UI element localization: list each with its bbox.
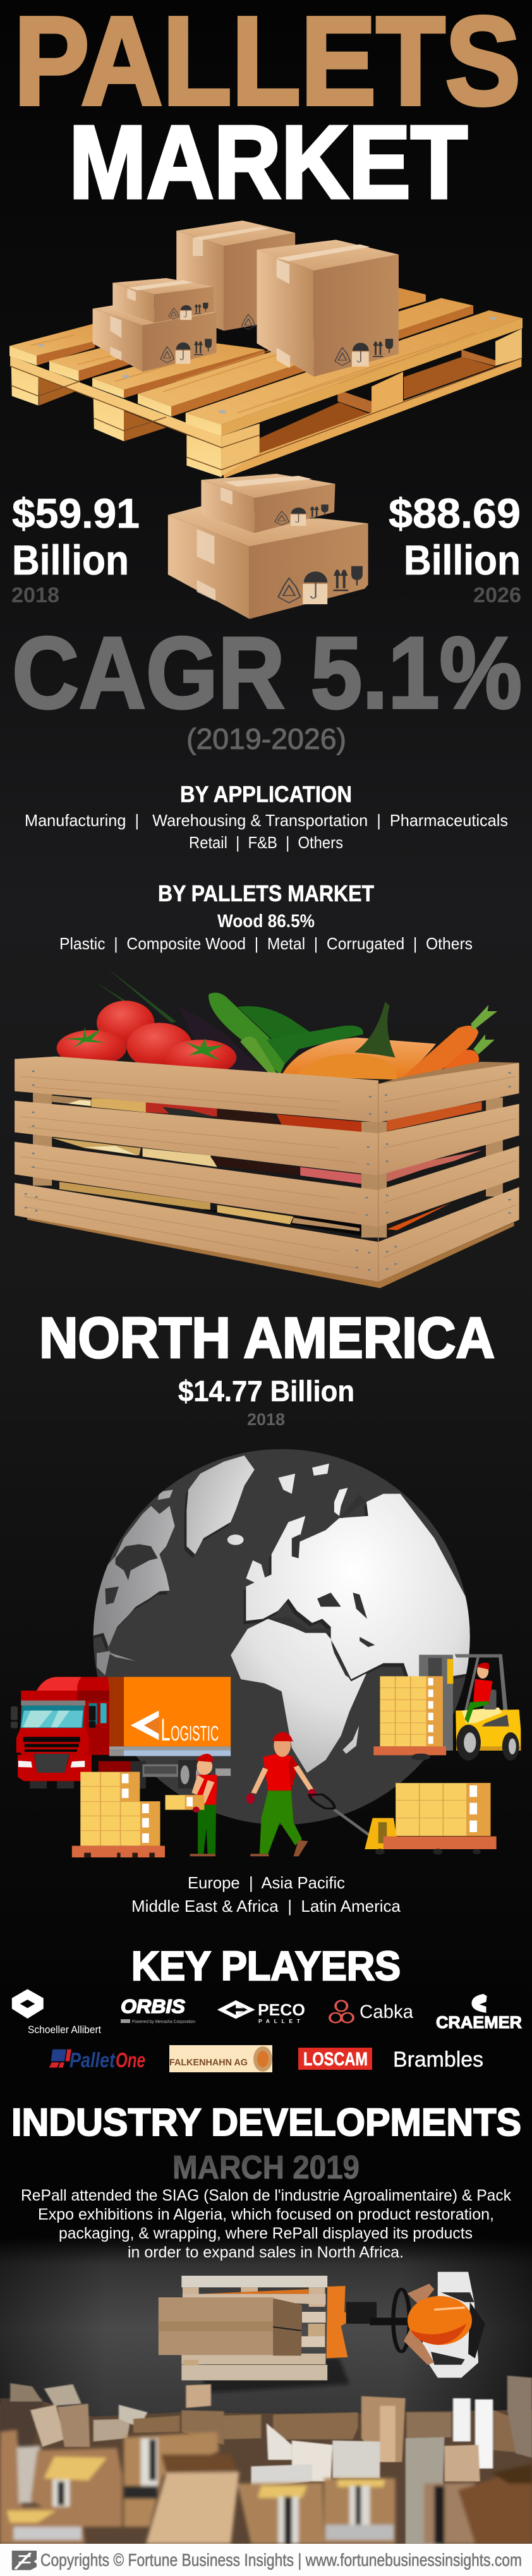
stat: 2018 value: 2018 bbox=[11, 583, 59, 607]
land masses bbox=[88, 1455, 482, 1773]
stat: 2026 value: Billion bbox=[404, 537, 521, 583]
heading: North America: NORTH AMERICA bbox=[39, 1306, 495, 1370]
paragraph: RePall development: RePall attended the SIAG (Salon de l'industrie Agroalimentaire) & Pack bbox=[21, 2187, 511, 2204]
pallet bbox=[9, 288, 523, 478]
far plank bbox=[397, 288, 426, 310]
inland seas bbox=[105, 1518, 375, 1679]
box big bbox=[257, 240, 399, 377]
stat: North America year: 2018 bbox=[247, 1410, 285, 1429]
CAGR period: (2019-2026) bbox=[186, 722, 346, 755]
crate base bbox=[27, 1218, 514, 1288]
section: by pallets market bbox=[59, 880, 473, 953]
logo: Brambles: Brambles bbox=[393, 2048, 483, 2072]
crate back rim bbox=[378, 1062, 519, 1084]
stat: 2026 value: $88.69 bbox=[389, 490, 521, 537]
paragraph: RePall development: in order to expand sales in North Africa. bbox=[128, 2244, 404, 2261]
logo: Loscam: LOSCAM bbox=[303, 2049, 368, 2070]
blurred parcels, mid row bbox=[0, 2376, 532, 2544]
large box bbox=[168, 506, 368, 619]
section: by application: Manufacturing | Warehousing & Transportation | Pharmaceuticals bbox=[25, 811, 508, 830]
truck wheels bbox=[30, 1760, 231, 1789]
section: by application: Retail | F&B | Others bbox=[189, 833, 343, 852]
paragraph: RePall development: packaging, & wrapping, where RePall displayed its products bbox=[59, 2225, 473, 2242]
illustration: globe bbox=[86, 1449, 482, 1825]
stat: 2026 value bbox=[389, 490, 521, 607]
plank C bbox=[92, 343, 265, 390]
section: by pallets market: BY PALLETS MARKET bbox=[158, 880, 374, 906]
illustration: vegetable crate bbox=[15, 968, 519, 1288]
logo: Peco Pallet: PALLET bbox=[258, 2018, 305, 2024]
parcels base layer bbox=[0, 2402, 532, 2544]
section: by pallets market: Wood 86.5% bbox=[217, 911, 315, 932]
stat: 2018 value bbox=[11, 490, 140, 607]
pallet and jack bbox=[159, 2276, 414, 2393]
stat: 2018 value: Billion bbox=[12, 537, 129, 583]
stat: 2026 value: 2026 bbox=[473, 583, 521, 607]
subheading: March 2019: MARCH 2019 bbox=[172, 2149, 360, 2186]
logo: Peco Pallet: PECO bbox=[258, 2000, 305, 2019]
pallet jack with cartons bbox=[365, 1783, 497, 1855]
section: by application: BY APPLICATION bbox=[180, 781, 352, 807]
plank D bbox=[49, 339, 143, 371]
illustration: logistics truck bbox=[11, 1654, 521, 1857]
logo: Cabka: Cabka bbox=[360, 2002, 413, 2022]
cargo box: L bbox=[161, 1712, 171, 1747]
plank E bbox=[9, 324, 95, 356]
text: other regions bbox=[131, 1873, 401, 1916]
stat: North America value: $14.77 Billion bbox=[178, 1375, 354, 1407]
illustration: wooden pallet with boxes bbox=[9, 221, 523, 478]
illustration: logistics truck: OGISTIC bbox=[171, 1722, 219, 1745]
cargo box bbox=[108, 1677, 231, 1756]
illustration: stacked boxes bbox=[168, 474, 368, 619]
section: by pallets market: Plastic | Composite Wood | Metal | Corrugated | Others bbox=[59, 934, 473, 953]
vegetables bbox=[57, 968, 497, 1079]
logo: Peco Pallet bbox=[217, 2000, 305, 2024]
heading: Key Players: KEY PLAYERS bbox=[131, 1943, 401, 1989]
truck cab bbox=[11, 1677, 131, 1781]
box small bbox=[112, 278, 214, 323]
logo: Craemer bbox=[436, 1994, 522, 2032]
carton stack: left bbox=[72, 1772, 165, 1857]
logo: Orbis: Powered by Menasha Corporation bbox=[132, 2019, 195, 2024]
logo: Schoeller Allibert bbox=[12, 1989, 101, 2036]
logo: Orbis: ORBIS bbox=[121, 1995, 185, 2017]
logo: Falkenhahn AG: FALKENHAHN AG bbox=[169, 2058, 248, 2068]
text: other regions: Middle East & Africa | Latin America bbox=[131, 1897, 401, 1916]
blurred parcels, foreground bbox=[0, 2429, 532, 2544]
forklift bbox=[373, 1654, 521, 1761]
logo: Cabka bbox=[330, 2001, 413, 2022]
text: other regions: Europe | Asia Pacific bbox=[188, 1873, 345, 1892]
crate slats bbox=[15, 1057, 519, 1282]
worker pulling pallet jack bbox=[246, 1732, 384, 1856]
paragraph: RePall development: Expo exhibitions in Algeria, which focused on product restoration, bbox=[38, 2206, 494, 2223]
logo: PalletOne: Pallet bbox=[70, 2048, 116, 2072]
box mid bbox=[93, 305, 217, 372]
paragraph: RePall development bbox=[21, 2187, 511, 2261]
logo: Craemer: CRAEMER bbox=[436, 2013, 522, 2032]
box back bbox=[176, 221, 295, 331]
logo: Schoeller Allibert: Schoeller Allibert bbox=[28, 2024, 101, 2036]
section: by application bbox=[25, 781, 508, 852]
title: Market: MARKET bbox=[69, 104, 468, 220]
photo: warehouse worker with pallet jack bbox=[0, 2237, 532, 2544]
plank A bbox=[186, 310, 523, 425]
plank B bbox=[138, 298, 473, 406]
logo: Falkenhahn AG bbox=[169, 2045, 272, 2072]
worker carrying box bbox=[166, 1754, 217, 1856]
crate posts bbox=[33, 1093, 503, 1237]
logo: PalletOne bbox=[49, 2048, 145, 2072]
land shadow bbox=[94, 1490, 466, 1681]
logo: PalletOne: One bbox=[116, 2048, 145, 2072]
footer logo bbox=[12, 2551, 37, 2570]
worker bbox=[404, 2272, 485, 2378]
produce through slats bbox=[51, 1095, 482, 1236]
stat: 2018 value: $59.91 bbox=[12, 490, 140, 537]
heading: Industry Developments: INDUSTRY DEVELOPMENTS bbox=[11, 2101, 521, 2144]
logo: Orbis bbox=[121, 1995, 195, 2024]
footer bar bbox=[0, 2544, 532, 2576]
small box bbox=[201, 474, 336, 533]
